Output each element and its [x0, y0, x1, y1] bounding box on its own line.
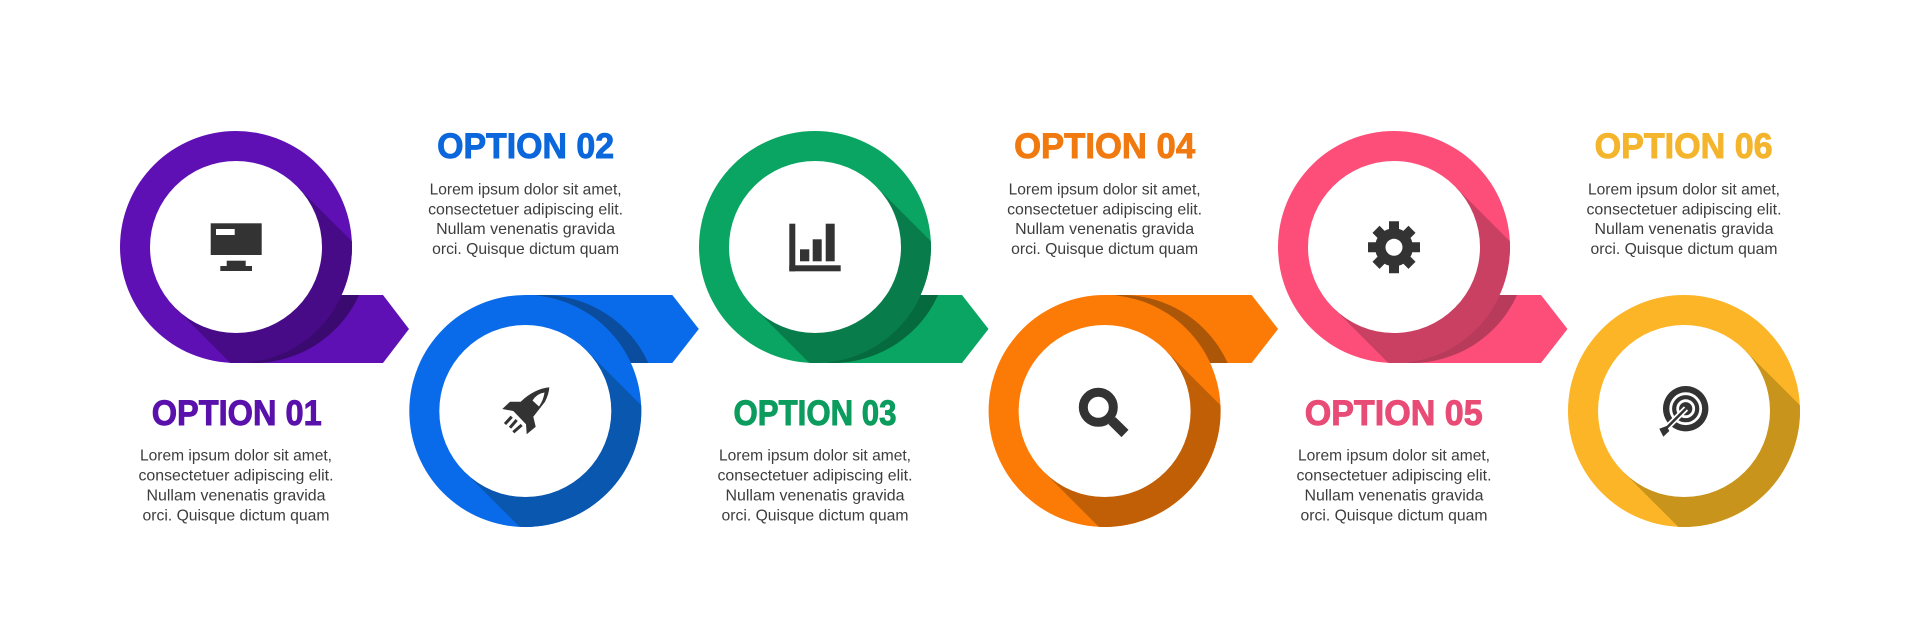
arrow tab 05 [1394, 295, 1568, 363]
ring centre 01 [150, 161, 322, 333]
text block: option 02: consectetuer adipiscing elit. [428, 201, 623, 218]
ring 05 [1278, 131, 1510, 363]
panel: option 05 ring with arrow tab [1278, 131, 1568, 372]
text block: option 06: Nullam venenatis gravida [1594, 221, 1774, 238]
text block: option 01: consectetuer adipiscing elit. [138, 468, 334, 485]
text block: option 01: orci. Quisque dictum quam [142, 507, 330, 524]
icon: gear [1368, 221, 1420, 273]
ring shadow 06 [1623, 350, 1809, 536]
text block: option 03 [718, 448, 912, 524]
heading: option 01: OPTION 01 [152, 394, 322, 433]
text block: option 01 [138, 448, 334, 524]
ring centre 06 [1598, 325, 1770, 497]
arrow tab 03 [815, 295, 988, 363]
text block: option 06: consectetuer adipiscing elit. [1586, 201, 1782, 218]
ring centre 04 [1019, 325, 1191, 497]
ring centre 03 [729, 161, 901, 333]
text block: option 01: Lorem ipsum dolor sit amet, [140, 448, 332, 465]
text block: option 06: Lorem ipsum dolor sit amet, [1588, 182, 1780, 198]
ring centre 05 [1308, 161, 1480, 333]
text block: option 03: orci. Quisque dictum quam [722, 507, 908, 524]
text block: option 03: consectetuer adipiscing elit. [718, 468, 912, 485]
panel: option 01 ring with arrow tab [120, 131, 409, 372]
arrow tab 02 [525, 295, 699, 363]
heading: option 02: OPTION 02 [437, 127, 614, 166]
text block: option 02: Nullam venenatis gravida [436, 221, 615, 238]
tab shadow 01 [244, 295, 359, 363]
text block: option 05: Lorem ipsum dolor sit amet, [1298, 448, 1490, 465]
heading: option 06: OPTION 06 [1595, 127, 1773, 166]
text block: option 04: consectetuer adipiscing elit. [1007, 201, 1202, 218]
text block: option 05: Nullam venenatis gravida [1304, 487, 1484, 504]
ring shadow 03 [754, 186, 940, 372]
panel: option 04 ring with arrow tab [989, 295, 1278, 536]
text block: option 05: consectetuer adipiscing elit. [1296, 468, 1492, 485]
ring 06 [1568, 295, 1800, 527]
panel: option 06 ring [1568, 295, 1809, 536]
text block: option 04: orci. Quisque dictum quam [1011, 241, 1198, 258]
text block: option 02: orci. Quisque dictum quam [432, 241, 619, 258]
tab shadow 04 [1113, 295, 1228, 363]
text block: option 02: Lorem ipsum dolor sit amet, [430, 182, 622, 198]
text block: option 04 [1007, 182, 1202, 258]
panel: option 03 ring with arrow tab [699, 131, 988, 372]
text block: option 03: Lorem ipsum dolor sit amet, [719, 448, 911, 465]
ring centre 02 [439, 325, 611, 497]
ring shadow 01 [175, 186, 361, 372]
text block: option 01: Nullam venenatis gravida [146, 487, 326, 504]
icon: monitor [211, 223, 262, 271]
arrow tab 01 [236, 295, 409, 363]
panel: option 02 ring with arrow tab [409, 295, 699, 536]
ring shadow 02 [464, 350, 650, 536]
ring shadow 05 [1333, 186, 1519, 372]
text block: option 04: Nullam venenatis gravida [1015, 221, 1194, 238]
text block: option 06 [1586, 182, 1782, 258]
text block: option 04: Lorem ipsum dolor sit amet, [1009, 182, 1201, 198]
icon: rocket [502, 387, 549, 434]
text block: option 02 [428, 182, 623, 258]
text block: option 05: orci. Quisque dictum quam [1300, 507, 1488, 524]
text block: option 05 [1296, 448, 1492, 524]
heading: option 04: OPTION 04 [1014, 127, 1196, 166]
arrow tab 04 [1105, 295, 1278, 363]
ring shadow 04 [1044, 350, 1230, 536]
tab shadow 03 [824, 295, 938, 363]
heading: option 05: OPTION 05 [1305, 394, 1483, 433]
ring 03 [699, 131, 931, 363]
heading: option 03: OPTION 03 [734, 394, 896, 433]
icon: bar chart [789, 224, 841, 271]
tab shadow 02 [534, 295, 648, 363]
text block: option 06: orci. Quisque dictum quam [1590, 241, 1778, 258]
ring 04 [989, 295, 1221, 527]
ring 01 [120, 131, 352, 363]
text block: option 03: Nullam venenatis gravida [726, 487, 905, 504]
icon: magnifier [1083, 392, 1125, 434]
ring 02 [409, 295, 641, 527]
tab shadow 05 [1402, 295, 1517, 363]
icon: target with arrow [1659, 386, 1708, 437]
